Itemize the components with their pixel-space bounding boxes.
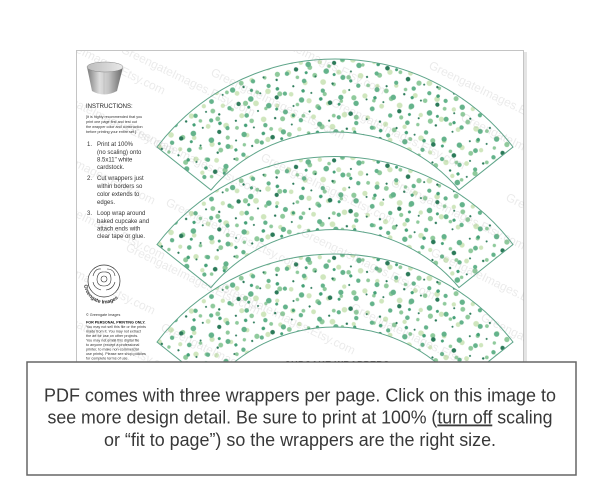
watermark text: GreengateImages.Etsy.com — [329, 95, 468, 173]
watermark text — [77, 51, 524, 362]
copyright and license text: use prints). Please see shop policies — [86, 352, 146, 356]
copyright and license text: printer, to make non-commercial — [86, 348, 139, 352]
callout text: PDF comes with three wrappers per page. Click on this image to — [44, 386, 556, 406]
instructions steps: cardstock. — [97, 165, 125, 171]
wrapper 2 — [157, 156, 513, 288]
watermark text: GreengateImages.Etsy.com — [209, 65, 348, 143]
watermark text: GreengateImages.Etsy.com — [429, 245, 568, 323]
instructions steps: baked cupcake and — [97, 219, 149, 225]
instructions steps: 3. — [87, 211, 92, 217]
watermark text: GreengateImages.Etsy.com — [29, 185, 168, 263]
sheet title: CUPCAKE WRAPPERS — [284, 360, 390, 370]
copyright and license text: for complete terms of use. — [86, 356, 129, 360]
watermark text: GreengateImages.Etsy.com — [299, 225, 438, 303]
instructions note: before printing your entire set.] — [86, 130, 136, 134]
watermark text: GreengateImages.Etsy.com — [29, 20, 168, 98]
instructions steps: (no scaling) onto — [97, 150, 142, 156]
watermark text: GreengateImages.Etsy.com — [159, 320, 298, 398]
logo: Greengate Images: Greengate Images — [84, 284, 118, 304]
instructions steps — [87, 142, 149, 240]
watermark text: GreengateImages.Etsy.com — [124, 240, 263, 318]
copyright and license text: FOR PERSONAL PRINTING ONLY. — [86, 320, 145, 324]
instructions note: print one page first and test out — [86, 120, 137, 124]
instructions heading: INSTRUCTIONS: — [86, 104, 133, 110]
instructions steps: color extends to — [97, 192, 140, 198]
instructions steps: clear tape or glue. — [97, 234, 145, 240]
instructions steps: within borders so — [96, 184, 143, 190]
watermark text: GreengateImages.Etsy.com — [39, 300, 178, 378]
icon: wrapped cup — [87, 62, 123, 94]
copyright and license text: You may not sell this file or the prints — [86, 325, 146, 329]
instructions note: the wrapper color and construction — [86, 125, 143, 129]
copyright and license text: You may not email this digital file — [86, 338, 139, 342]
callout text: or “fit to page”) so the wrappers are the right size. — [104, 430, 496, 450]
instructions steps: Loop wrap around — [97, 211, 145, 217]
watermark text: GreengateImages.Etsy.com — [389, 175, 528, 253]
wrapper 3 — [157, 254, 513, 385]
copyright and license text: © Greengate Images — [86, 313, 120, 317]
instructions steps: Cut wrappers just — [97, 176, 144, 182]
instructions steps: Print at 100% — [97, 142, 134, 148]
instructions steps: 1. — [87, 142, 92, 148]
watermark text: GreengateImages.Etsy.com — [119, 42, 258, 120]
instructions steps: 2. — [87, 176, 92, 182]
watermark text: GreengateImages.Etsy.com — [19, 130, 158, 208]
watermark text: GreengateImages.Etsy.com — [219, 280, 358, 358]
watermark text: GreengateImages.Etsy.com — [19, 240, 158, 318]
watermark text: GreengateImages.Etsy.com — [164, 195, 303, 273]
copyright and license text: made from it. You may not extract — [86, 330, 141, 334]
callout — [27, 362, 576, 475]
watermark text: GreengateImages.Etsy.com — [349, 300, 488, 378]
watermark text: GreengateImages.Etsy.com — [259, 150, 398, 228]
instructions note — [86, 115, 143, 134]
wrapper 1 — [157, 59, 513, 190]
instructions steps: attach ends with — [97, 226, 140, 232]
panel: printable sheet — [76, 50, 527, 370]
logo: Greengate Images — [84, 264, 120, 304]
instructions steps: 8.5x11" white — [97, 158, 133, 164]
instructions steps: edges. — [97, 200, 115, 206]
watermark text: GreengateImages.Etsy.com — [427, 58, 566, 136]
watermark text: GreengateImages.Etsy.com — [39, 80, 178, 158]
copyright and license text: the art for use on other projects. — [86, 334, 138, 338]
callout text — [44, 386, 556, 450]
watermark text: GreengateImages.Etsy.com — [249, 20, 388, 98]
watermark text: GreengateImages.Etsy.com — [459, 110, 598, 188]
copyright and license text — [86, 313, 146, 360]
copyright and license text: to anyone (except a professional — [86, 343, 139, 347]
instructions note: [It is highly recommended that you — [86, 115, 142, 119]
callout text: see more design detail. Be sure to print at 100% (turn off scaling — [48, 408, 552, 428]
watermark text: GreengateImages.Etsy.com — [124, 120, 263, 198]
